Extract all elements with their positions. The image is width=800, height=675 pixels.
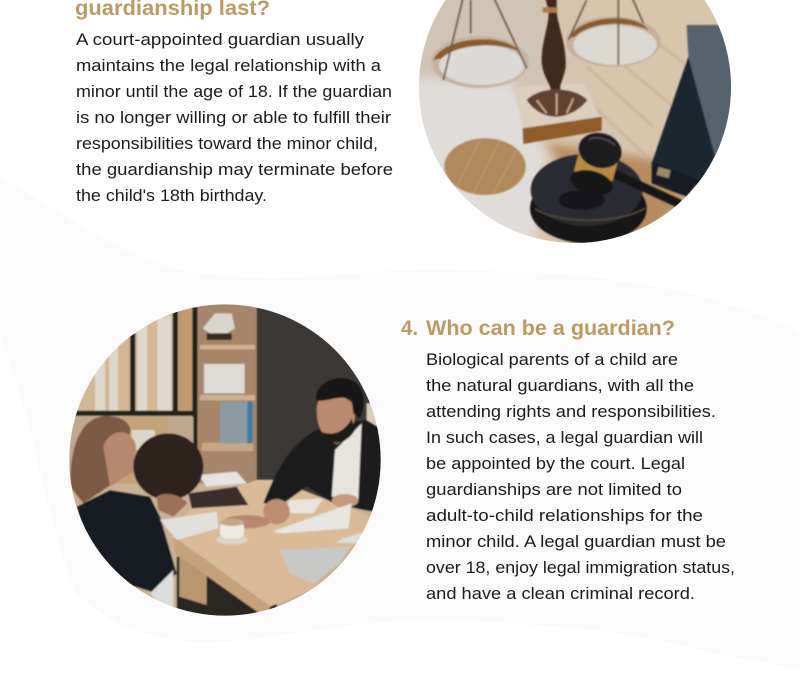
left pan [431, 36, 529, 88]
text block: who can be a guardian: In such cases, a legal guardian will [426, 429, 703, 447]
stain [444, 138, 526, 195]
text block: who can be a guardian: over 18, enjoy legal immigration status, [426, 559, 735, 577]
man in suit [263, 420, 383, 513]
dark wall [256, 308, 370, 500]
text block: who can be a guardian [426, 351, 735, 603]
chains [443, 0, 643, 80]
gavel block [530, 173, 647, 243]
heading: who can be a guardian: Who can be a guardian? [426, 317, 675, 340]
text block: who can be a guardian: and have a clean criminal record. [426, 585, 695, 603]
bookcase [198, 303, 257, 483]
text block: who can be a guardian: attending rights and responsibilities. [426, 403, 716, 421]
picture frame behind woman [113, 417, 168, 483]
photo: scales and gavel [410, 0, 737, 253]
text block: guardianship duration: is no longer willing or able to fulfill their [76, 109, 392, 127]
text block: guardianship duration: A court-appointed guardian usually [76, 31, 365, 49]
background wave [0, 177, 800, 670]
text block: who can be a guardian: guardianships are not limited to [426, 481, 682, 499]
gavel head [570, 132, 623, 196]
heading: who can be a guardian: 4. [401, 317, 418, 340]
text block: guardianship duration [76, 31, 393, 205]
text block: who can be a guardian: minor child. A legal guardian must be [426, 533, 726, 551]
text block: guardianship duration: the child's 18th birthday. [76, 187, 267, 205]
column [542, 0, 566, 92]
text block: who can be a guardian: Biological parents of a child are [426, 351, 678, 369]
photo: legal consultation meeting [67, 300, 390, 623]
binder [687, 25, 733, 158]
table [173, 480, 370, 607]
text block: guardianship duration: minor until the age of 18. If the guardian [76, 83, 392, 101]
table leg [179, 553, 207, 605]
coffee cup [216, 534, 248, 545]
folder and papers [198, 472, 247, 487]
right pan [566, 16, 661, 67]
base plate [513, 83, 602, 130]
gavel handle [613, 173, 680, 204]
man seen from behind [133, 433, 203, 500]
left wall panels [78, 314, 172, 410]
text block: who can be a guardian: the natural guardians, with all the [426, 377, 694, 395]
text block: who can be a guardian: adult-to-child relationships for the [426, 507, 703, 525]
text block: guardianship duration: responsibilities toward the minor child, [76, 135, 378, 153]
text block: who can be a guardian: be appointed by the court. Legal [426, 455, 685, 473]
woman [70, 416, 130, 503]
text block: guardianship duration: maintains the legal relationship with a [76, 57, 382, 75]
text block: guardianship duration: the guardianship may terminate before [76, 161, 393, 179]
document in hand [272, 503, 352, 533]
soft tabletop light areas [419, 0, 687, 239]
under table shadow [177, 557, 277, 623]
